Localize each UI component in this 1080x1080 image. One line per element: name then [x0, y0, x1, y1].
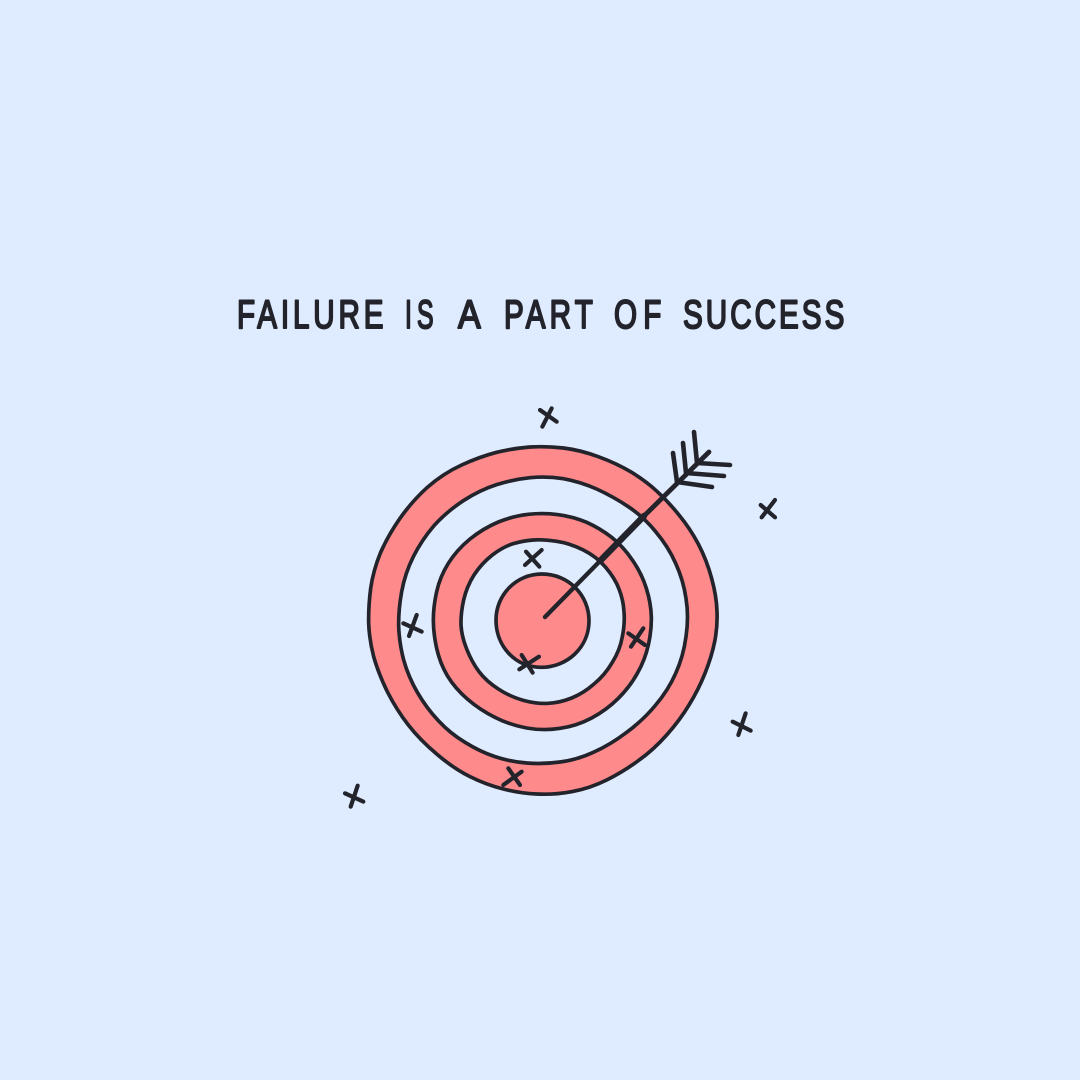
arrow fletching [673, 432, 730, 487]
title [237, 291, 844, 338]
title: OF [614, 293, 661, 337]
cross: top [540, 408, 557, 427]
cross: outer ring left [403, 615, 422, 636]
target [369, 447, 717, 794]
bullseye [496, 574, 589, 667]
title: A [458, 291, 481, 337]
title: FAILURE [237, 293, 384, 337]
arrow shaft [545, 452, 709, 617]
title: PART [504, 293, 593, 337]
cross: outer ring bottom [503, 768, 522, 785]
outer ring [369, 447, 717, 794]
arrow [545, 432, 730, 617]
cross: middle ring right [628, 628, 645, 647]
title: IS [405, 293, 434, 338]
cross: inner white ring [525, 550, 542, 567]
cross marks [345, 408, 775, 807]
cross: lower right [733, 713, 751, 735]
middle ring [433, 514, 651, 730]
cross: right [761, 500, 775, 517]
title: SUCCESS [683, 293, 844, 337]
cross: lower left [345, 786, 363, 807]
cross: bullseye edge [519, 655, 539, 673]
